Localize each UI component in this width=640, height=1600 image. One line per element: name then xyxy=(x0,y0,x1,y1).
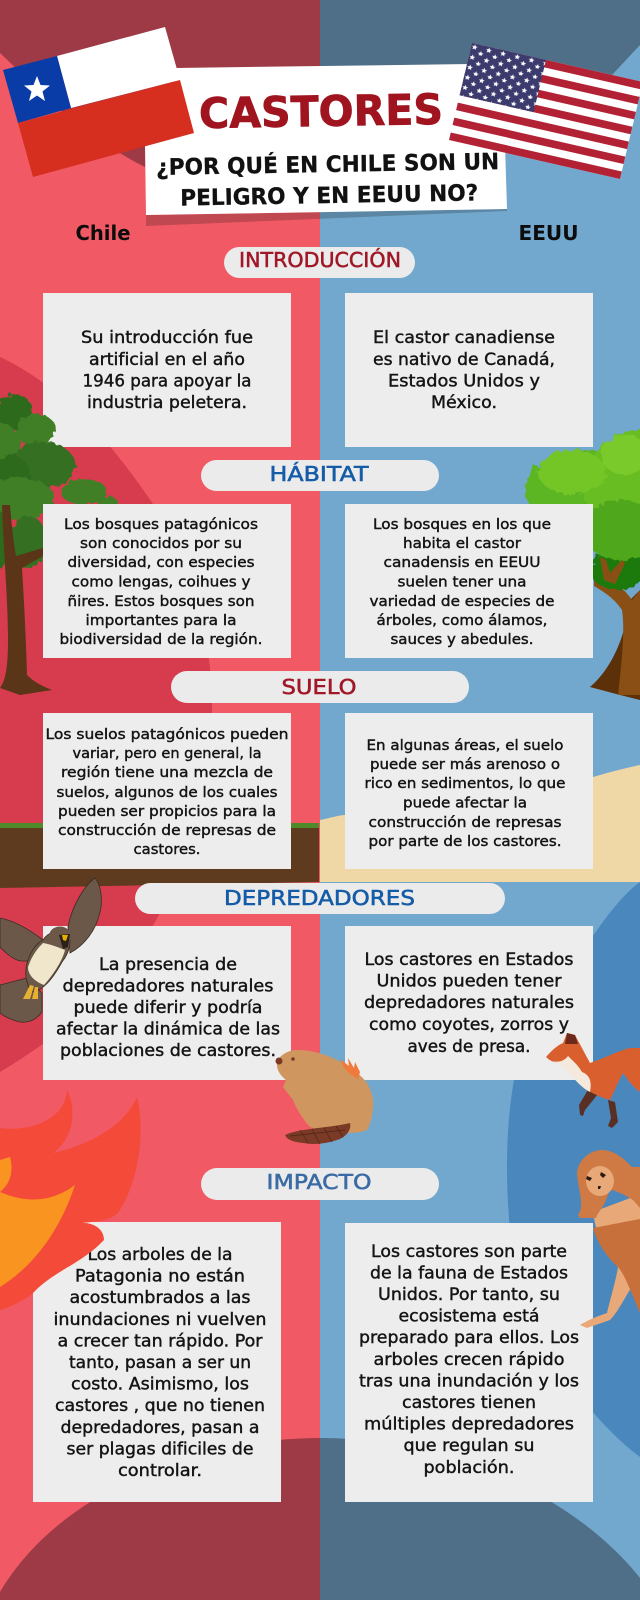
panel: hábitat Chile: importantes para la xyxy=(86,613,236,629)
panel: depredadores EEUU: aves de presa. xyxy=(408,1037,530,1056)
panel: depredadores EEUU xyxy=(345,926,593,1080)
panel: hábitat Chile: biodiversidad de la región. xyxy=(60,632,262,648)
heading: Introducción xyxy=(224,247,415,278)
icon: fox xyxy=(546,1033,640,1128)
top shape: dark blue xyxy=(320,0,640,182)
panel: impacto EEUU: preparado para ellos. Los xyxy=(359,1328,579,1347)
title shadow xyxy=(146,209,507,226)
title banner xyxy=(145,64,507,215)
flag: USA xyxy=(449,43,640,179)
panel: introducción Chile: artificial en el año xyxy=(89,350,245,369)
panel: impacto EEUU: arboles crecen rápido xyxy=(374,1350,564,1369)
panel: suelo Chile: construcción de represas de xyxy=(58,823,276,839)
background blob: dark blue xyxy=(507,882,640,1457)
panel: hábitat EEUU: canadensis en EEUU xyxy=(384,555,540,571)
heading: Impacto: IMPACTO xyxy=(266,1170,372,1194)
panel: impacto Chile: a crecer tan rápido. Por xyxy=(58,1332,263,1350)
panel: hábitat Chile: diversidad, con especies xyxy=(68,555,254,571)
tree: EEUU xyxy=(525,430,640,700)
heading: Depredadores: DEPREDADORES xyxy=(224,886,415,910)
panel: introducción Chile: Su introducción fue xyxy=(81,328,253,347)
panel: suelo EEUU: En algunas áreas, el suelo xyxy=(366,738,564,754)
panel: depredadores Chile: poblaciones de castores. xyxy=(60,1041,276,1060)
background blob: dark red xyxy=(0,357,212,1072)
ground: soil xyxy=(0,823,319,888)
panel: depredadores Chile: puede diferir y podría xyxy=(74,998,262,1017)
heading: Suelo xyxy=(171,671,469,703)
panel: hábitat Chile: ñires. Estos bosques son xyxy=(68,594,254,610)
panel: suelo EEUU: por parte de los castores. xyxy=(368,834,562,850)
panel: depredadores EEUU: Los castores en Estados xyxy=(364,950,574,969)
panel: impacto Chile: inundaciones ni vuelven xyxy=(54,1310,266,1329)
background: Chile half xyxy=(0,0,320,1600)
panel: suelo Chile: región tiene una mezcla de xyxy=(61,765,273,781)
panel: depredadores Chile: depredadores naturales xyxy=(62,976,274,996)
panel: impacto EEUU: población. xyxy=(424,1458,514,1477)
panel: impacto EEUU: tras una inundación y los xyxy=(359,1372,579,1390)
panel: impacto Chile: controlar. xyxy=(118,1461,202,1480)
panel: impacto Chile: ser plagas dificiles de xyxy=(66,1440,254,1458)
panel: hábitat EEUU: variedad de especies de xyxy=(370,594,555,610)
panel: suelo Chile xyxy=(43,713,291,869)
panel: introducción EEUU: México. xyxy=(431,393,497,412)
icon: bird of prey xyxy=(0,878,101,1022)
panel: introducción Chile: 1946 para apoyar la xyxy=(82,372,252,390)
panel: hábitat Chile xyxy=(43,504,291,658)
tree: Chile xyxy=(0,394,118,695)
panel: suelo Chile: Los suelos patagónicos pueden xyxy=(46,727,288,743)
panel: impacto EEUU: ecosistema está xyxy=(398,1306,540,1326)
panel: introducción EEUU: es nativo de Canadá, xyxy=(373,350,555,369)
icon: beaver xyxy=(276,1050,373,1144)
panel: hábitat Chile: como lengas, coihues y xyxy=(72,574,251,590)
panel: impacto Chile: depredadores, pasan a xyxy=(60,1418,260,1437)
panel: depredadores EEUU: Unidos pueden tener xyxy=(376,972,562,990)
panel: depredadores Chile: La presencia de xyxy=(99,955,237,974)
panel: hábitat EEUU: árboles, como álamos, xyxy=(376,613,548,629)
heading: Suelo: SUELO xyxy=(282,675,356,699)
column label: EEUU: EEUU xyxy=(518,221,578,245)
panel: impacto Chile: acostumbrados a las xyxy=(70,1288,250,1307)
panel: impacto Chile: castores , que no tienen xyxy=(55,1396,265,1415)
panel: introducción EEUU xyxy=(345,293,593,447)
panel: hábitat EEUU: suelen tener una xyxy=(398,574,526,590)
panel: impacto Chile: Patagonia no están xyxy=(75,1266,245,1286)
ground: sand xyxy=(320,765,640,882)
panel: hábitat EEUU: Los bosques en los que xyxy=(373,517,551,533)
flag: Chile xyxy=(3,27,194,177)
panel: suelo Chile: castores. xyxy=(134,842,200,858)
panel: depredadores EEUU: como coyotes, zorros y xyxy=(369,1015,569,1034)
heading: Introducción: INTRODUCCIÓN xyxy=(239,248,401,272)
panel: suelo EEUU: construcción de represas xyxy=(368,815,562,831)
panel: impacto EEUU: castores tienen xyxy=(402,1393,536,1412)
heading: Impacto xyxy=(201,1168,439,1200)
panel: impacto Chile: costo. Asimismo, los xyxy=(71,1374,249,1394)
panel: suelo EEUU: puede afectar la xyxy=(403,796,527,812)
panel: impacto EEUU: múltiples depredadores xyxy=(364,1414,574,1434)
subtitle: PELIGRO Y EN EEUU NO? xyxy=(180,180,478,212)
bottom hill: dark red xyxy=(0,1438,320,1600)
panel: introducción EEUU: El castor canadiense xyxy=(373,328,555,347)
background: EEUU half xyxy=(320,0,640,1600)
panel: impacto EEUU: Unidos. Por tanto, su xyxy=(378,1285,560,1304)
title: CASTORES: CASTORES xyxy=(199,85,443,138)
heading: Hábitat: HÁBITAT xyxy=(270,462,369,486)
panel: introducción Chile xyxy=(43,293,291,447)
panel: impacto EEUU: que regulan su xyxy=(404,1436,534,1455)
panel: depredadores Chile: afectar la dinámica de las xyxy=(56,1020,280,1038)
icon: flame xyxy=(0,1090,141,1310)
panel: suelo Chile: suelos, algunos de los cuales xyxy=(56,785,278,801)
panel: hábitat Chile: son conocidos por su xyxy=(80,536,242,552)
subtitle xyxy=(156,147,500,212)
panel: hábitat EEUU: habita el castor xyxy=(403,536,521,552)
panel: introducción EEUU: Estados Unidos y xyxy=(388,372,540,390)
panel: impacto EEUU xyxy=(345,1223,593,1502)
heading: Hábitat xyxy=(201,460,439,491)
panel: depredadores Chile xyxy=(43,926,291,1080)
column label: Chile: Chile xyxy=(76,221,130,245)
heading: Depredadores xyxy=(135,883,505,914)
panel: introducción Chile: industria peletera. xyxy=(87,393,247,412)
panel: hábitat Chile: Los bosques patagónicos xyxy=(64,517,258,533)
panel: impacto Chile: tanto, pasan a ser un xyxy=(69,1353,251,1372)
bottom hill: dark blue xyxy=(320,1438,640,1600)
panel: hábitat EEUU xyxy=(345,504,593,658)
panel: suelo Chile: pueden ser propicios para la xyxy=(58,804,276,820)
panel: impacto Chile xyxy=(33,1222,281,1502)
panel: impacto EEUU: Los castores son parte xyxy=(371,1242,567,1261)
icon: woman with long hair xyxy=(577,1150,640,1328)
panel: impacto Chile: Los arboles de la xyxy=(88,1245,233,1264)
panel: suelo EEUU xyxy=(345,713,593,869)
subtitle: ¿POR QUÉ EN CHILE SON UN xyxy=(156,147,499,181)
panel: suelo EEUU: rico en sedimentos, lo que xyxy=(364,776,566,792)
panel: suelo EEUU: puede ser más arenoso o xyxy=(370,757,560,773)
panel: suelo Chile: variar, pero en general, la xyxy=(72,746,262,762)
top shape: dark red xyxy=(0,0,320,182)
panel: impacto EEUU: de la fauna de Estados xyxy=(370,1264,568,1282)
panel: hábitat EEUU: sauces y abedules. xyxy=(390,632,534,648)
panel: depredadores EEUU: depredadores naturales xyxy=(364,993,574,1012)
